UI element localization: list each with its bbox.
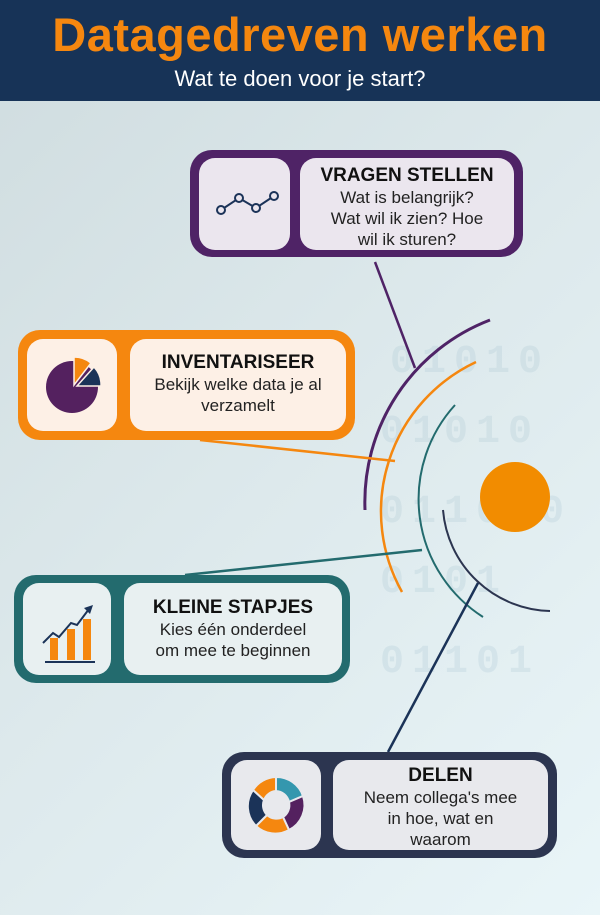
text: DELEN [408, 765, 473, 786]
icon: bar chart [23, 583, 111, 675]
text [130, 339, 346, 431]
text [124, 583, 342, 675]
text: Wat is belangrijk? [340, 188, 474, 207]
text: 01101 [380, 640, 540, 685]
teal arc [419, 405, 483, 617]
icon: cycle [231, 760, 321, 850]
text: 01010 [380, 410, 540, 455]
text: 01010 [380, 790, 540, 835]
connectors [375, 262, 415, 368]
orange dot [480, 462, 550, 532]
text: Bekijk welke data je al [154, 375, 322, 394]
text: Wat wil ik zien? Hoe [331, 209, 483, 228]
text: KLEINE STAPJES [153, 597, 313, 618]
text: INVENTARISEER [162, 352, 314, 373]
icon: line chart [199, 158, 290, 250]
header [0, 0, 600, 101]
purple arc [365, 320, 490, 510]
text: VRAGEN STELLEN [320, 165, 494, 186]
text: 01010 [390, 340, 550, 385]
orange arc [381, 362, 476, 592]
panel: inventariseer [18, 330, 355, 440]
text: wil ik sturen? [358, 230, 456, 249]
icon: pie chart [27, 339, 117, 431]
text: verzamelt [201, 396, 275, 415]
text: Kies één onderdeel [160, 620, 306, 639]
subtitle: Wat te doen voor je start? [174, 66, 426, 91]
text: 011010 [380, 490, 572, 535]
panel: kleine stapjes [14, 575, 350, 683]
title: Datagedreven werken [52, 8, 548, 61]
text: om mee te beginnen [156, 641, 310, 660]
text: waarom [410, 830, 471, 849]
text: 0101 [380, 560, 508, 605]
panel: delen [222, 752, 557, 858]
panel: vragen stellen [190, 150, 523, 257]
text [300, 158, 514, 250]
text: in hoe, wat en [388, 809, 493, 828]
text: Neem collega's mee [364, 788, 517, 807]
text [333, 760, 548, 850]
navy arc [443, 510, 550, 611]
